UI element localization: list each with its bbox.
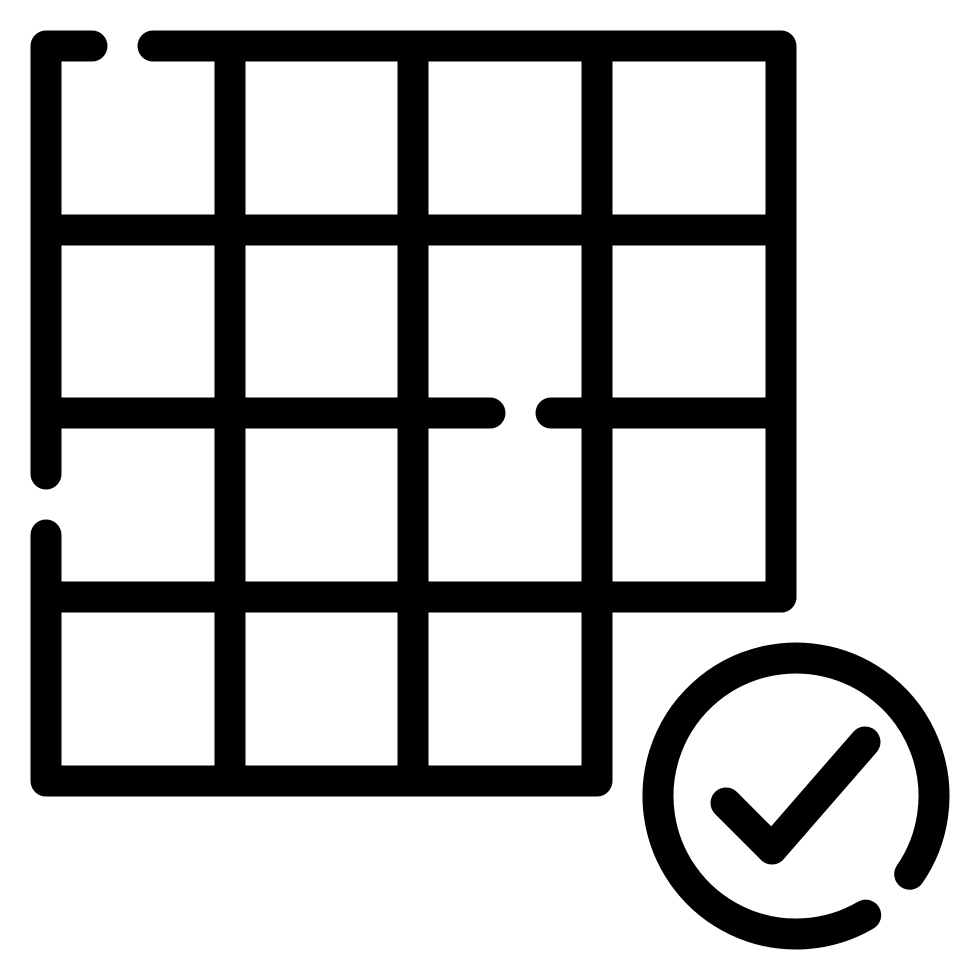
grid: outer frame and lines (46, 46, 781, 781)
badge: open circle with check mark (658, 658, 934, 934)
